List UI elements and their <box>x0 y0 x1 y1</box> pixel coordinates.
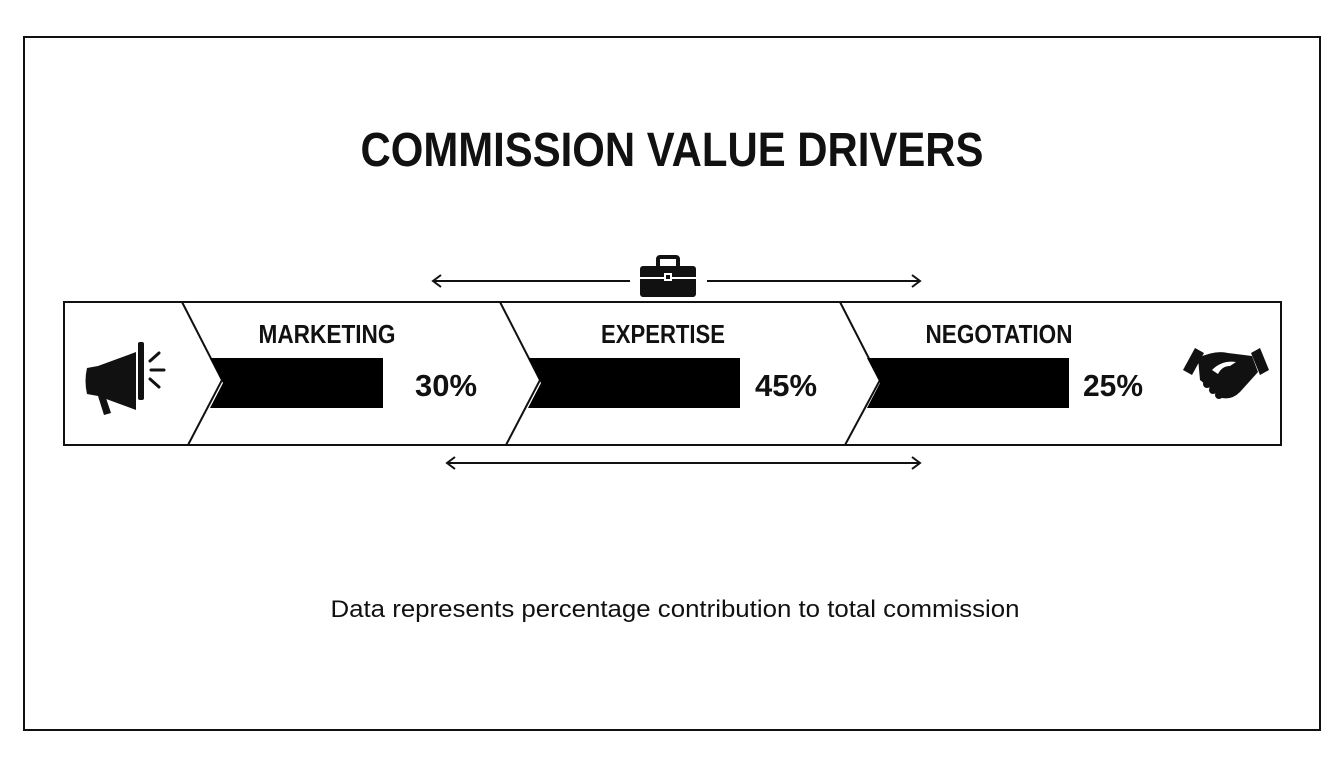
arrow: bottom double arrow <box>447 457 920 469</box>
panel: driver band <box>64 302 1281 445</box>
label: negotiation: NEGOTATION <box>926 319 1072 349</box>
label: expertise: EXPERTISE <box>601 319 725 349</box>
bar: negotiation 25% <box>867 358 1069 408</box>
bar: expertise 45% <box>528 358 740 408</box>
title: COMMISSION VALUE DRIVERS <box>360 124 984 177</box>
icon: megaphone <box>86 342 164 415</box>
value: 25%: 25% <box>1083 368 1143 403</box>
icon: briefcase <box>640 257 696 297</box>
arrow: top double arrow <box>433 275 920 287</box>
bar: marketing 30% <box>210 358 383 408</box>
label: marketing: MARKETING <box>258 319 396 349</box>
icon: handshake <box>1183 348 1269 399</box>
footnote: Data represents percentage contribution to total commission <box>330 596 1020 623</box>
value: 30%: 30% <box>415 368 477 403</box>
value: 45%: 45% <box>755 368 817 403</box>
